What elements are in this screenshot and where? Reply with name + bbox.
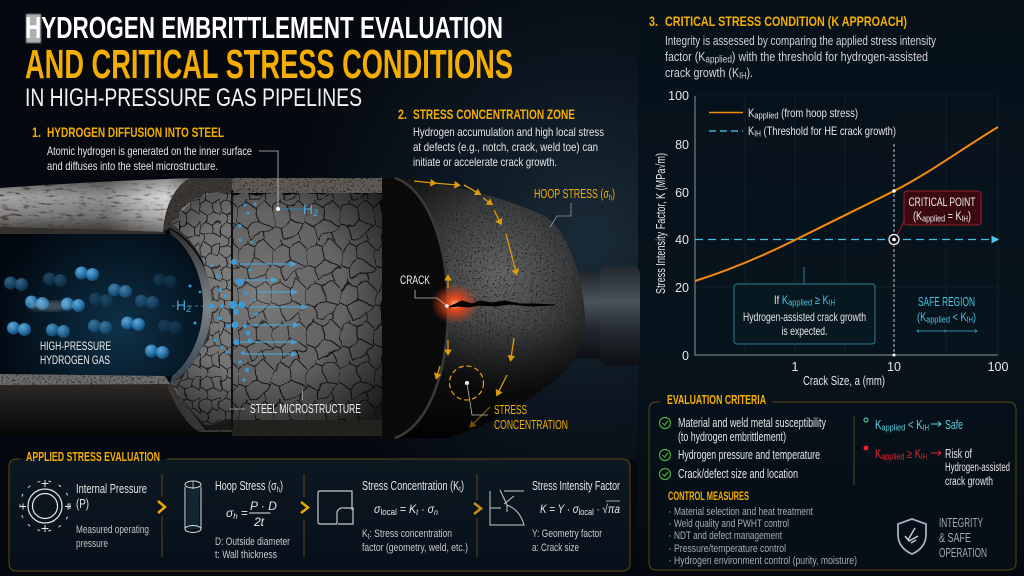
bore with hydrogen gas [0, 234, 203, 376]
safe condition: K [875, 418, 883, 432]
title: IN HIGH-PRESSURE GAS PIPELINES [25, 84, 362, 112]
large grain section [232, 193, 382, 421]
text: hoop stress: ) [280, 479, 283, 493]
label: hoop stress [534, 187, 615, 227]
panel: applied stress evaluation [9, 449, 630, 571]
text: stress concentration: : Stress concentration [369, 528, 452, 540]
lower edge of upper wall [0, 227, 170, 236]
top cut band [232, 178, 387, 193]
legend: K [748, 124, 756, 138]
callout: crack growth condition [734, 267, 875, 344]
control measures list: Weld quality and PWHT control [674, 518, 789, 530]
label: H2 with leader from section 1: H [303, 201, 313, 217]
label: safe region: < K [950, 310, 967, 324]
y tick labels: 100 [668, 89, 689, 103]
callout: critical point: = K [945, 211, 962, 223]
y tick labels: 60 [675, 186, 689, 200]
text: hoop stress: 2t [253, 515, 265, 529]
section 1: hydrogen diffusion heading and text: Atomic hydrogen is generated on the inner surface [47, 144, 252, 158]
risk condition: IH [921, 452, 927, 462]
callout: critical point [904, 191, 981, 225]
section 3: critical stress heading and text: CRITICAL STRESS CONDITION (K APPROACH) [665, 13, 907, 29]
text: hoop stress: = [238, 506, 248, 520]
text: stress concentration: t [368, 532, 370, 541]
callout: crack growth condition: If K [774, 293, 790, 307]
section 3: critical stress heading and text: ). [746, 65, 753, 80]
callout: critical point: ) [968, 211, 971, 223]
divider [853, 416, 855, 485]
hoop stress arrows [414, 181, 516, 425]
text: stress intensity factor: K = Y · σ [540, 502, 587, 516]
text: stress intensity factor: a: Crack size [532, 542, 579, 554]
section 2: stress concentration heading and text [398, 106, 604, 169]
text: stress concentration: = [397, 502, 409, 516]
section 2: stress concentration heading and text: initiate or accelerate crack growth. [413, 155, 557, 169]
title [25, 10, 513, 112]
criteria list: Hydrogen pressure and temperature [678, 448, 820, 462]
icon: cylinder [185, 481, 201, 532]
control measures list: Material selection and heat treatment [674, 506, 813, 518]
diffusion arrows [240, 264, 306, 354]
x axis title: Crack Size, a (mm) [803, 374, 885, 388]
legend [709, 106, 896, 138]
text: stress intensity factor: Y: Geometry factor [532, 528, 602, 540]
risk condition: K [875, 447, 883, 461]
y tick labels [668, 89, 689, 363]
right column background [638, 0, 1024, 576]
icon: shield [898, 519, 926, 554]
panel: evaluation criteria [649, 392, 1016, 570]
label: H2 with leader from section 1 [259, 151, 318, 218]
panel: applied stress evaluation: APPLIED STRESS EVALUATION [26, 449, 160, 464]
text: stress concentration: ) [461, 479, 464, 493]
section 3: critical stress heading and text: factor (K [665, 49, 714, 64]
risk condition: crack growth [945, 476, 993, 488]
label: high-pressure hydrogen gas: HIGH-PRESSURE [40, 339, 111, 353]
text: stress concentration [362, 479, 468, 554]
icon: stress concentration [318, 491, 353, 524]
x tick labels: 10 [887, 360, 901, 374]
text: stress concentration: · σ [418, 502, 435, 516]
chart axes [695, 96, 998, 355]
section 1: hydrogen diffusion heading and text: HYDROGEN DIFFUSION INTO STEEL [47, 124, 224, 140]
control measures list: · [668, 543, 672, 555]
label: stress concentration [494, 402, 568, 432]
label: H2 in bore: H [176, 297, 186, 313]
divider and arrow 2 [301, 474, 308, 557]
chart: stress intensity factor vs crack size [654, 89, 1008, 388]
legend: K [748, 106, 756, 120]
text: internal pressure: Internal Pressure [76, 482, 147, 496]
text: stress concentration: σ [374, 502, 381, 516]
text: hoop stress: P · D [250, 499, 277, 513]
safe condition [864, 418, 963, 434]
text: hoop stress [215, 479, 290, 561]
safe condition: < K [905, 418, 923, 432]
text: stress concentration: t [459, 485, 462, 494]
callout: critical point: applied [922, 214, 945, 224]
text: stress concentration: n [434, 508, 438, 517]
control measures list: NDT and defect management [674, 530, 782, 542]
text: stress intensity factor: · √πa [594, 502, 620, 516]
central light in bore [28, 301, 72, 311]
pipe body lower shadow [385, 178, 585, 438]
callout: critical point: (K [913, 211, 924, 223]
safe condition: IH [923, 424, 929, 432]
title: HYDROGEN EMBRITTLEMENT EVALUATION [25, 10, 503, 45]
y tick labels: 20 [675, 281, 689, 295]
dark right end of cutaway [382, 178, 448, 438]
hydrogen molecules in bore [4, 266, 182, 359]
text: stress concentration: factor (geometry, weld, etc.) [362, 542, 468, 554]
label: high-pressure hydrogen gas [40, 339, 111, 367]
text: internal pressure: pressure [76, 538, 108, 550]
section 2: stress concentration heading and text: 2. [398, 106, 407, 122]
text: internal pressure [76, 482, 149, 550]
label: stress concentration: CONCENTRATION [494, 417, 568, 432]
callout: critical point: CRITICAL POINT [908, 195, 976, 209]
text: hoop stress: h [233, 512, 238, 521]
threshold line KIH [695, 238, 998, 240]
icon: internal pressure ring [20, 480, 71, 532]
text: stress concentration: Stress Concentration (K [362, 479, 495, 493]
section 2: stress concentration heading and text: STRESS CONCENTRATION ZONE [413, 106, 575, 122]
risk condition: applied [881, 452, 904, 462]
safe condition: applied [881, 422, 905, 434]
legend: applied [754, 110, 779, 122]
small grain shading [172, 193, 232, 430]
y tick labels: 80 [675, 138, 689, 152]
label: H2 in bore [172, 297, 210, 314]
points on vertical line [892, 189, 896, 356]
control measures list: Pressure/temperature control [674, 543, 786, 555]
title: AND CRITICAL STRESS CONDITIONS [25, 41, 513, 87]
large grain shading [232, 190, 384, 422]
x tick labels: 100 [988, 360, 1008, 374]
risk condition [864, 446, 1010, 488]
callout: crack growth condition: is expected. [782, 324, 828, 338]
label: high-pressure hydrogen gas: HYDROGEN GAS [40, 353, 110, 367]
section 2: stress concentration heading and text: at defects (e.g., notch, crack, weld toe) can [413, 140, 598, 154]
control measures list: · [668, 555, 672, 567]
control measures list: Hydrogen environment control (purity, moisture) [674, 555, 857, 567]
safe condition: Safe [945, 418, 963, 432]
face edge [395, 178, 448, 438]
y axis title: Stress Intensity Factor, K (MPa√m) [654, 153, 668, 294]
label: safe region: applied [926, 314, 950, 326]
lower silver lip [0, 374, 170, 385]
glow at crack [431, 284, 479, 324]
stress concentration circle [450, 366, 488, 415]
text: stress intensity factor [532, 479, 620, 554]
crack [449, 301, 555, 307]
label: safe region: ) [973, 310, 976, 324]
pipe body with crack side [385, 178, 585, 438]
section 1: hydrogen diffusion heading and text: and diffuses into the steel microstructure. [47, 159, 218, 173]
label: crack [400, 273, 449, 308]
label: H2 with leader from section 1: 2 [313, 208, 318, 218]
text: stress concentration: t [416, 508, 419, 517]
label: hoop stress: ) [612, 187, 615, 201]
label: crack: CRACK [400, 273, 430, 287]
control measures heading: CONTROL MEASURES [668, 489, 749, 503]
text: stress concentration: K [362, 528, 369, 540]
legend: (from hoop stress) [779, 106, 858, 120]
control measures list: · [668, 506, 672, 518]
text: hoop stress: h [277, 485, 280, 494]
chart grid [695, 96, 998, 355]
text: hoop stress: Hoop Stress (σ [215, 479, 299, 493]
label: hoop stress: HOOP STRESS (σ [534, 187, 639, 201]
divider and arrow 3 [474, 474, 481, 557]
callout: crack growth condition: applied [788, 298, 812, 308]
background glow behind pipeline [0, 0, 640, 460]
control measures list: · [668, 518, 672, 530]
risk condition: ≥ K [904, 447, 921, 461]
label: safe region: IH [967, 316, 973, 324]
label: safe region: (K [917, 310, 929, 324]
legend: (Threshold for HE crack growth) [761, 124, 896, 138]
section 3: critical stress heading and text [649, 13, 936, 80]
lower outer pipe [0, 384, 232, 436]
section 1: hydrogen diffusion heading and text [32, 124, 252, 173]
right stub pipe [575, 266, 640, 366]
text: hoop stress: t: Wall thickness [215, 549, 277, 561]
label: H2 in bore: 2 [186, 304, 191, 314]
integrity and safe operation: & SAFE [939, 531, 971, 545]
section 3: critical stress heading and text: ) with the threshold for hydrogen-assisted [732, 49, 928, 64]
text: stress intensity factor: Stress Intensity Factor [532, 479, 620, 493]
x tick labels: 1 [792, 360, 799, 374]
section 3: critical stress heading and text: applied [705, 54, 732, 66]
text: stress intensity factor: local [579, 507, 594, 517]
wall ring [162, 178, 232, 432]
integrity and safe operation: OPERATION [939, 546, 987, 560]
icons: green checks [660, 418, 670, 480]
curve K applied [695, 127, 998, 281]
text: stress concentration: K [409, 502, 417, 516]
integrity and safe operation: INTEGRITY [939, 516, 983, 530]
y tick labels: 40 [675, 233, 689, 247]
criteria list: Material and weld metal susceptibility [678, 416, 827, 430]
upper silver surface [0, 178, 195, 232]
section 3: critical stress heading and text: Integrity is assessed by comparing the applied stress intensity [665, 33, 936, 48]
section 3: critical stress heading and text: IH [739, 70, 746, 80]
criteria list [678, 416, 827, 481]
bottom cut band [232, 420, 387, 436]
callout: crack growth condition: ≥ K [812, 293, 829, 307]
text: internal pressure: Measured operating [76, 524, 149, 536]
section 3: critical stress heading and text: 3. [649, 13, 658, 29]
label: hoop stress: h [609, 193, 612, 202]
hydrogen atoms diffusing [188, 202, 258, 382]
text: stress concentration: local [380, 507, 397, 517]
section 1: hydrogen diffusion heading and text: 1. [32, 124, 41, 140]
y tick labels: 0 [682, 349, 689, 363]
label: safe region [917, 295, 977, 332]
legend: IH [754, 128, 761, 138]
small grain section [172, 193, 232, 425]
callout: critical point: IH [962, 214, 968, 224]
text: hoop stress: σ [226, 506, 233, 520]
icon: stress intensity crack [490, 490, 524, 525]
control measures list: · [668, 530, 672, 542]
label: steel microstructure: STEEL MICROSTRUCTURE [250, 402, 361, 416]
control measures list [668, 506, 857, 567]
critical size vertical line [893, 144, 895, 355]
shadow between grain sections [231, 190, 233, 430]
bore inner rim [170, 229, 212, 384]
illustration: cutaway pipeline [0, 151, 640, 438]
callout: crack growth condition: IH [829, 298, 835, 308]
x tick labels [792, 360, 1008, 374]
label: safe region: SAFE REGION [918, 295, 975, 309]
divider and arrow 1 [158, 474, 165, 557]
critical point marker [889, 222, 904, 244]
section 2: stress concentration heading and text: Hydrogen accumulation and high local stress [413, 125, 604, 139]
integrity and safe operation [939, 516, 987, 560]
section 3: critical stress heading and text: crack growth (K [665, 65, 755, 80]
text: internal pressure: (P) [76, 497, 89, 511]
text: hoop stress: D: Outside diameter [215, 536, 290, 548]
callout: crack growth condition: Hydrogen-assisted crack growth [743, 310, 866, 324]
criteria list: (to hydrogen embrittlement) [678, 430, 786, 444]
panel: evaluation criteria: EVALUATION CRITERIA [667, 392, 766, 407]
label: stress concentration: STRESS [494, 402, 527, 417]
label: steel microstructure [230, 390, 361, 416]
criteria list: Crack/defect size and location [678, 467, 798, 481]
risk condition: Risk of [945, 447, 972, 461]
